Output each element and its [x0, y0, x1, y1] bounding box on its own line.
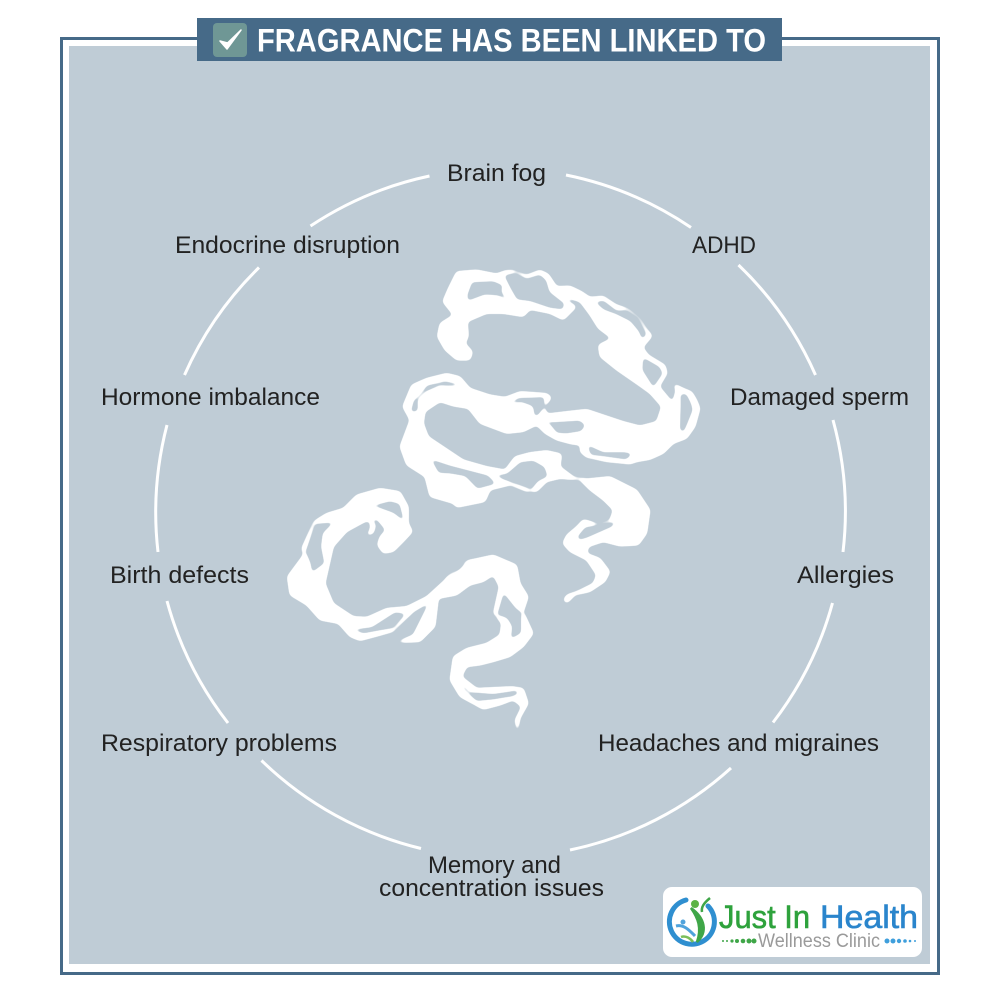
logo text: Just In: Just In — [719, 899, 810, 935]
label list — [101, 160, 909, 902]
label: Headaches and migraines: Headaches and migraines — [598, 730, 879, 757]
panel: background — [69, 46, 930, 964]
logo dots left — [722, 938, 756, 944]
label: ADHD: ADHD — [692, 232, 756, 259]
label: Brain fog: Brain fog — [447, 160, 546, 187]
logo: Just In Health Wellness Clinic — [663, 887, 922, 957]
logo text: Health: Health — [820, 899, 918, 935]
title: FRAGRANCE HAS BEEN LINKED TO — [257, 22, 766, 58]
label: Birth defects: Birth defects — [110, 562, 249, 589]
label: Hormone imbalance: Hormone imbalance — [101, 384, 320, 411]
logo dots right — [884, 938, 916, 944]
label: Respiratory problems: Respiratory problems — [101, 730, 337, 757]
logo text: Wellness Clinic: Wellness Clinic — [758, 931, 880, 952]
label: Allergies: Allergies — [797, 562, 894, 589]
label: Endocrine disruption: Endocrine disruption — [175, 232, 400, 259]
icon: check mark — [213, 23, 247, 57]
illustration: fragrance smoke lower — [287, 488, 533, 734]
label: Memory and concentration issues: concentration issues — [379, 875, 604, 902]
label: Memory and concentration issues — [379, 852, 604, 902]
title banner — [197, 18, 782, 61]
label: Memory and concentration issues: Memory and — [428, 852, 561, 879]
illustration: fragrance smoke upper — [400, 270, 700, 603]
label: Damaged sperm: Damaged sperm — [730, 384, 909, 411]
icon: logo emblem — [669, 898, 714, 944]
circular ring arcs — [156, 175, 845, 850]
